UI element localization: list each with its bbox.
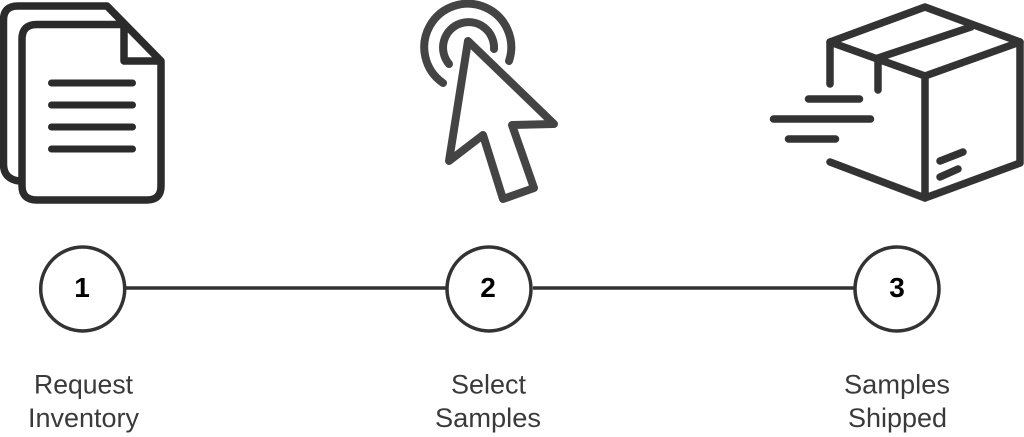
label: samples shipped: [844, 370, 950, 433]
label: select samples: Select: [451, 370, 527, 400]
label: request inventory: [28, 370, 140, 433]
step 1 marker: [41, 247, 125, 331]
step 2 marker: [447, 247, 531, 331]
label: select samples: [435, 370, 541, 433]
label: request inventory: Inventory: [28, 403, 140, 433]
step 3 marker: [855, 247, 939, 331]
label: samples shipped: Samples: [844, 370, 950, 400]
step 1 marker: 1: [74, 272, 90, 303]
label: request inventory: Request: [34, 370, 134, 400]
label: select samples: Samples: [435, 403, 541, 433]
step 3 marker: 3: [889, 272, 905, 303]
timeline connector: [126, 286, 854, 290]
icon: cursor click: [424, 4, 554, 199]
icon: shipping box: [774, 7, 1020, 198]
label: samples shipped: Shipped: [848, 403, 947, 433]
step 2 marker: 2: [480, 272, 496, 303]
icon: documents: [4, 6, 161, 200]
